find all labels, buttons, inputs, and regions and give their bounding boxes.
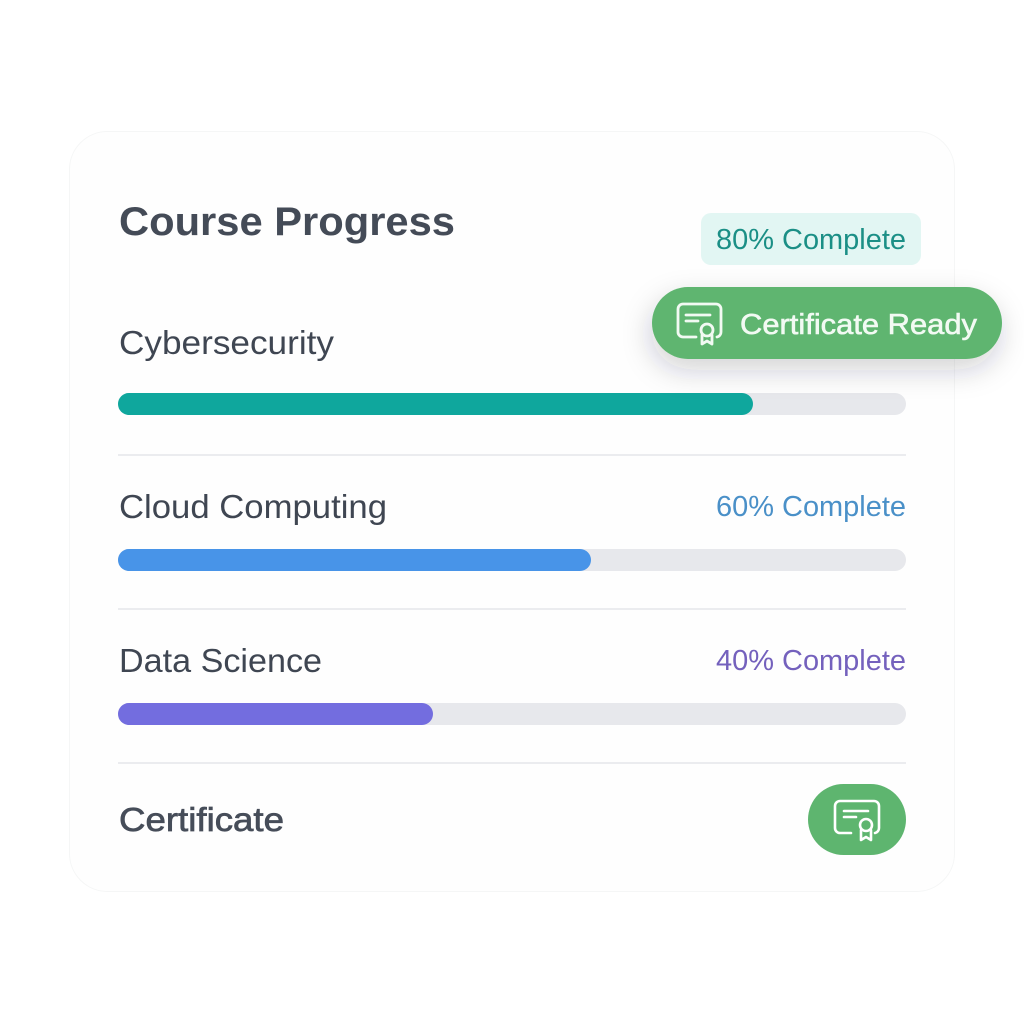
badge: 80% complete [701, 213, 921, 265]
course row: data science: 40% Complete [716, 645, 906, 677]
course row: cloud computing: Cloud Computing [119, 488, 387, 525]
floating pill: certificate ready [652, 287, 1002, 359]
course row: cloud computing [118, 488, 906, 571]
certificate button [808, 784, 906, 855]
course row: data science: Data Science [119, 642, 322, 679]
certificate row: Certificate [119, 801, 284, 838]
icon: certificate [678, 304, 721, 344]
certificate row [119, 784, 906, 855]
icon: certificate [835, 801, 879, 840]
course row: cybersecurity [118, 324, 906, 415]
panel: course progress card [70, 132, 954, 892]
course row: data science [118, 642, 906, 725]
course row: cloud computing: 60% Complete [716, 491, 906, 523]
course row: cybersecurity: Cybersecurity [119, 324, 335, 361]
title: Course Progress [119, 200, 455, 244]
badge: 80% complete: 80% Complete [716, 224, 906, 256]
floating pill: certificate ready: Certificate Ready [740, 309, 978, 341]
